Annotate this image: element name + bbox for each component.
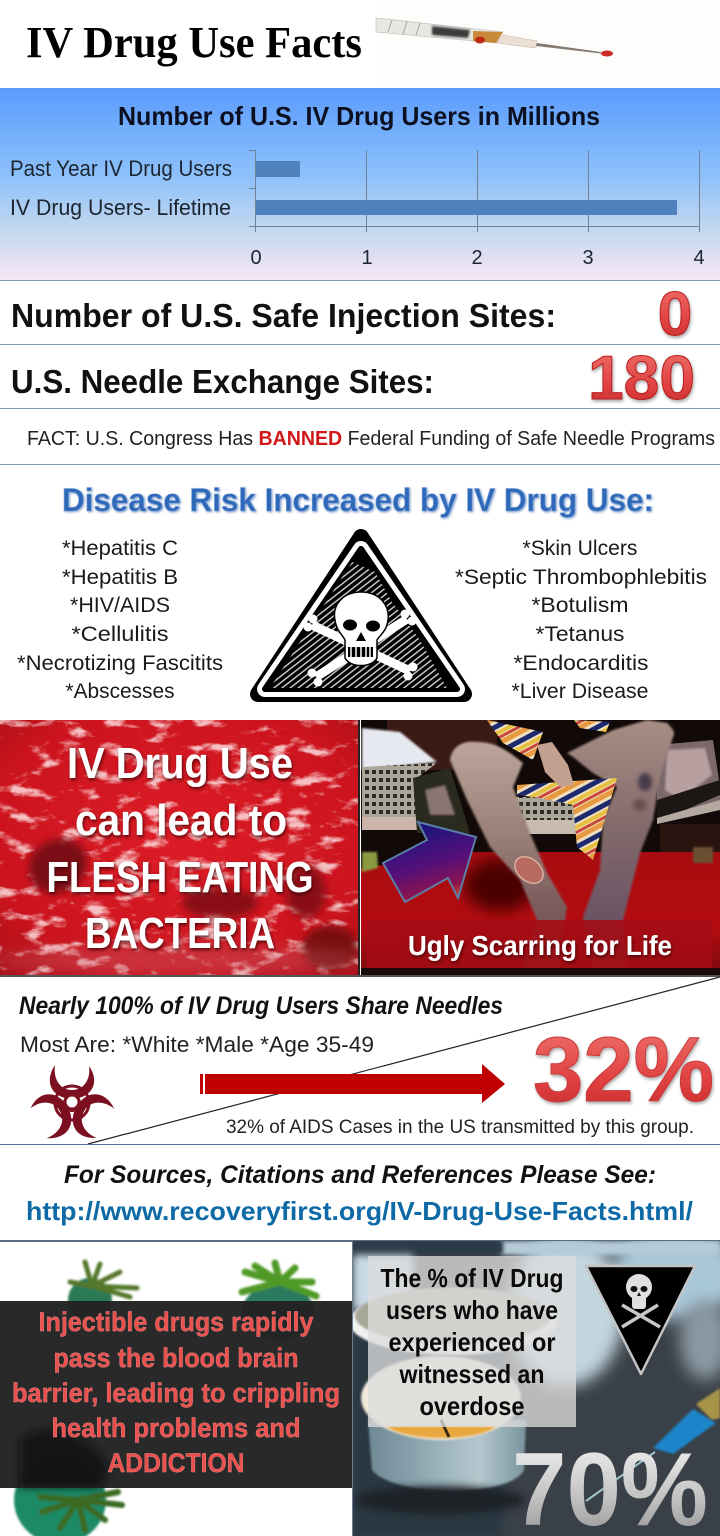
skull bbox=[334, 592, 388, 666]
axis labels: 2 bbox=[471, 247, 483, 269]
panel: disease risk bbox=[17, 482, 707, 703]
addiction text: health problems and bbox=[52, 1413, 300, 1443]
bar: past year users bbox=[256, 161, 300, 177]
axis labels bbox=[250, 247, 705, 269]
diagonal divider bbox=[88, 977, 720, 1144]
axis labels: 1 bbox=[361, 247, 373, 269]
heading: Nearly 100% of IV Drug Users Share Needles bbox=[19, 992, 503, 1020]
chart title: Number of U.S. IV Drug Users in Millions bbox=[118, 101, 600, 131]
overdose text: The % of IV Drug bbox=[380, 1263, 564, 1293]
disease list: right: *Skin Ulcers bbox=[522, 537, 638, 560]
header banner bbox=[0, 0, 720, 88]
panel: sources bbox=[0, 1161, 720, 1242]
candle bbox=[355, 1356, 526, 1514]
title: IV Drug Use Facts bbox=[26, 18, 362, 67]
legs bbox=[448, 720, 676, 928]
panel: bar chart of U.S. IV drug users bbox=[0, 88, 720, 280]
fact line: FACT: U.S. Congress Has BANNED Federal Funding of Safe Needle Programs bbox=[27, 427, 715, 450]
addiction text: barrier, leading to crippling bbox=[12, 1378, 340, 1408]
caption: BACTERIA bbox=[85, 909, 275, 958]
category label: lifetime: IV Drug Users- Lifetime bbox=[10, 195, 231, 220]
caption bbox=[46, 739, 314, 958]
caption: can lead to bbox=[75, 796, 287, 845]
gridlines bbox=[249, 150, 700, 232]
disease list: right: *Endocarditis bbox=[514, 652, 648, 675]
crossed bones bbox=[304, 610, 418, 686]
disease list: left: *Abscesses bbox=[66, 680, 174, 703]
axis labels: 0 bbox=[250, 247, 262, 269]
blurred background shapes bbox=[353, 1230, 720, 1386]
addiction text: Injectible drugs rapidly bbox=[38, 1307, 314, 1337]
icon: biohazard bbox=[27, 1065, 117, 1143]
photo panel: overdose statistic bbox=[349, 1230, 720, 1536]
scar bbox=[514, 856, 544, 884]
addiction text: pass the blood brain bbox=[54, 1343, 298, 1373]
heading: Disease Risk Increased by IV Drug Use: bbox=[62, 482, 654, 518]
overdose text: users who have bbox=[386, 1295, 558, 1325]
disease list: left: *Hepatitis C bbox=[62, 537, 178, 560]
syringe bbox=[586, 1388, 720, 1501]
icon: syringe with blood drop bbox=[376, 18, 613, 56]
disease list: left bbox=[17, 537, 223, 703]
icon: pointing arrow bbox=[383, 822, 476, 902]
photo panel: poppies and addiction bbox=[0, 1242, 352, 1536]
category label: past year: Past Year IV Drug Users bbox=[10, 156, 232, 181]
big number 32%: 32% bbox=[533, 1019, 714, 1121]
label: U.S. Needle Exchange Sites: bbox=[11, 363, 434, 400]
disease list: right bbox=[455, 537, 707, 703]
bowl bbox=[349, 1288, 557, 1355]
bar: lifetime users bbox=[256, 200, 677, 215]
disease list: right: *Liver Disease bbox=[512, 680, 648, 703]
photo panel: flesh eating bacteria bbox=[0, 720, 370, 976]
carpet and sofa bbox=[361, 728, 720, 976]
panel: safe injection sites bbox=[0, 280, 720, 349]
overdose text: witnessed an bbox=[399, 1359, 544, 1389]
icon: inverted skull triangle bbox=[586, 1266, 695, 1374]
disease list: left: *HIV/AIDS bbox=[70, 594, 170, 617]
overdose text: experienced or bbox=[388, 1327, 556, 1357]
overdose text bbox=[380, 1263, 564, 1421]
axis labels: 4 bbox=[693, 247, 705, 269]
caption: FLESH EATING bbox=[46, 853, 314, 902]
disease list: left: *Cellulitis bbox=[72, 623, 168, 646]
demographics: Most Are: *White *Male *Age 35-49 bbox=[20, 1032, 374, 1057]
dark text band bbox=[0, 1301, 352, 1488]
panel: needle exchange sites bbox=[0, 344, 720, 413]
panel: needle sharing and AIDS bbox=[0, 975, 720, 1145]
text box bbox=[368, 1256, 576, 1427]
caption: 32% of AIDS Cases in the US transmitted by this group. bbox=[226, 1116, 694, 1138]
disease list: right: *Septic Thrombophlebitis bbox=[455, 566, 707, 589]
icon: skull warning triangle bbox=[258, 537, 464, 694]
caption: Ugly Scarring for Life bbox=[408, 930, 672, 961]
arrow bbox=[200, 1064, 505, 1103]
sources heading: For Sources, Citations and References Please See: bbox=[64, 1161, 656, 1189]
disease list: left: *Hepatitis B bbox=[62, 566, 178, 589]
disease list: left: *Necrotizing Fascitits bbox=[17, 652, 223, 675]
axis labels: 3 bbox=[582, 247, 594, 269]
photo panel: ugly scarring bbox=[361, 720, 720, 976]
overdose text: overdose bbox=[420, 1391, 524, 1421]
striped cloth bbox=[487, 720, 617, 860]
caption band bbox=[361, 920, 720, 976]
poppy pods bbox=[14, 1262, 316, 1536]
addiction text bbox=[12, 1307, 340, 1478]
disease list: right: *Tetanus bbox=[536, 623, 624, 646]
disease list: right: *Botulism bbox=[532, 594, 628, 617]
label: Number of U.S. Safe Injection Sites: bbox=[11, 297, 556, 334]
sources url: http://www.recoveryfirst.org/IV-Drug-Use-Facts.html/ bbox=[26, 1196, 693, 1226]
number 0: 0 bbox=[658, 280, 692, 349]
number 180: 180 bbox=[588, 344, 695, 413]
caption: IV Drug Use bbox=[67, 739, 293, 788]
addiction text: ADDICTION bbox=[108, 1448, 244, 1478]
